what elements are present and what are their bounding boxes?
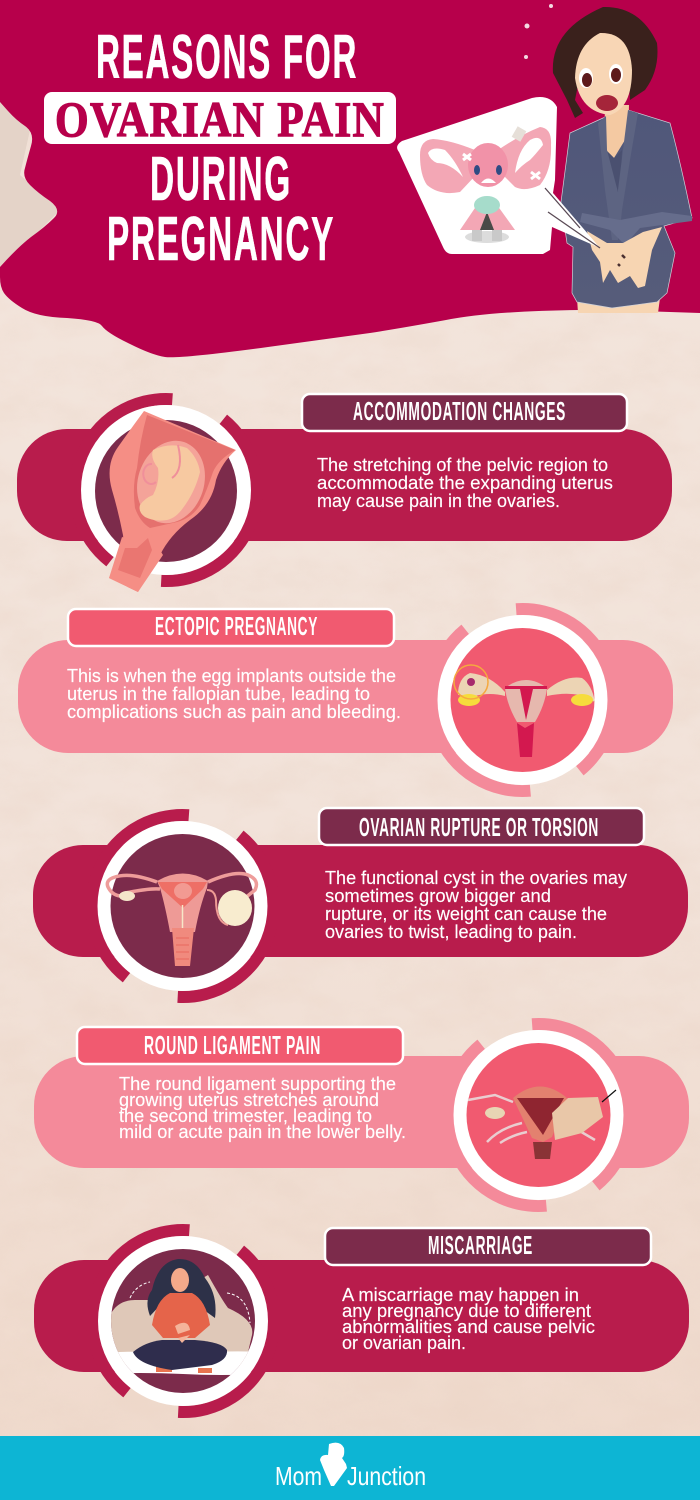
icon: uterus with fetus — [109, 411, 236, 592]
robe belt — [580, 212, 692, 245]
logo: MomJunction — [275, 1443, 426, 1491]
decorative ring arcs — [431, 609, 614, 791]
body text: may cause pain in the ovaries. — [317, 490, 560, 511]
panel: ectopic pregnancy — [18, 609, 673, 791]
robe lapels — [598, 110, 638, 240]
body text: A miscarriage may happen in — [342, 1284, 579, 1305]
neck and chest — [604, 105, 629, 158]
eyes — [579, 64, 623, 88]
icon: woman sitting holding belly — [111, 1259, 252, 1375]
heading: ECTOPIC PREGNANCY — [155, 611, 318, 641]
body text: any pregnancy due to different — [342, 1300, 591, 1321]
decorative ring arcs — [447, 1024, 630, 1206]
body text: sometimes grow bigger and — [325, 885, 551, 906]
panel: miscarriage — [34, 1228, 689, 1412]
body text: The stretching of the pelvic region to — [317, 454, 608, 475]
title — [44, 23, 396, 274]
icon: cartoon uterus — [420, 126, 551, 243]
heading — [319, 808, 644, 845]
dress inner — [604, 148, 622, 200]
inner circle — [95, 420, 237, 562]
logo wordmark — [275, 1461, 426, 1491]
inner circle — [450, 628, 594, 772]
inner circle — [111, 1249, 255, 1393]
icon: uterus with round ligament — [468, 1086, 616, 1159]
body text: or ovarian pain. — [342, 1332, 466, 1353]
heading — [77, 1027, 403, 1064]
panel background — [18, 640, 673, 753]
panel background — [33, 845, 688, 957]
icon: uterus with ovarian cyst — [107, 874, 256, 966]
body text — [342, 1284, 595, 1353]
white circle frame — [454, 1030, 624, 1200]
panel background — [17, 429, 672, 541]
title line: pregnancy: PREGNANCY — [107, 205, 335, 274]
heading: ROUND LIGAMENT PAIN — [144, 1030, 321, 1060]
panel: ovarian rupture or torsion — [33, 808, 688, 997]
white circle frame — [98, 1236, 268, 1406]
heading — [68, 609, 394, 646]
icon: uterus with ectopic egg — [454, 665, 595, 757]
finger shadows — [618, 255, 625, 266]
sweat drops — [524, 4, 553, 59]
body text: rupture, or its weight can cause the — [325, 903, 607, 924]
body text — [119, 1073, 406, 1142]
mouth — [596, 95, 618, 111]
body text: the second trimester, leading to — [119, 1105, 372, 1126]
decorative ring arcs — [92, 815, 274, 997]
white circle frame — [438, 615, 608, 785]
title line: reasons for: REASONS FOR — [96, 23, 358, 92]
title line: during: DURING — [150, 145, 292, 214]
header torn banner — [0, 0, 700, 357]
body text: growing uterus stretches around — [119, 1089, 379, 1110]
body text: accommodate the expanding uterus — [317, 472, 613, 493]
body text — [325, 867, 628, 942]
white circle frame — [98, 821, 268, 991]
robe — [561, 110, 692, 308]
body text — [67, 665, 401, 722]
hair — [553, 7, 658, 118]
decorative ring arcs — [75, 399, 257, 581]
logo wordmark: Junction — [347, 1461, 426, 1491]
body text: abnormalities and cause pelvic — [342, 1316, 595, 1337]
footer bar — [0, 1436, 700, 1500]
decorative ring arcs — [92, 1230, 274, 1412]
speech bubble — [397, 97, 600, 254]
body text: The round ligament supporting the — [119, 1073, 396, 1094]
body text — [317, 454, 613, 511]
white circle frame — [81, 405, 251, 575]
title highlight: ovarian pain: OVARIAN PAIN — [55, 91, 385, 147]
panel: accommodation changes — [17, 394, 672, 592]
inner circle — [110, 834, 254, 978]
heading — [302, 394, 627, 431]
bubble tail strokes — [545, 188, 600, 248]
face — [575, 33, 632, 115]
body text: mild or acute pain in the lower belly. — [119, 1121, 406, 1142]
legs — [577, 298, 660, 313]
heading — [325, 1228, 651, 1265]
hands — [587, 227, 662, 288]
panel background — [34, 1056, 689, 1168]
panel background — [34, 1260, 689, 1372]
body text: complications such as pain and bleeding. — [67, 701, 401, 722]
inner circle — [466, 1043, 610, 1187]
body text: This is when the egg implants outside the — [67, 665, 396, 686]
illustration: woman in pain — [524, 4, 692, 313]
logo icon: mother and child — [320, 1443, 347, 1486]
body text: uterus in the fallopian tube, leading to — [67, 683, 370, 704]
panel: round ligament pain — [34, 1024, 689, 1206]
body text: The functional cyst in the ovaries may — [325, 867, 628, 888]
logo wordmark: Mom — [275, 1461, 322, 1491]
heading: MISCARRIAGE — [428, 1230, 533, 1260]
body text: ovaries to twist, leading to pain. — [325, 921, 577, 942]
